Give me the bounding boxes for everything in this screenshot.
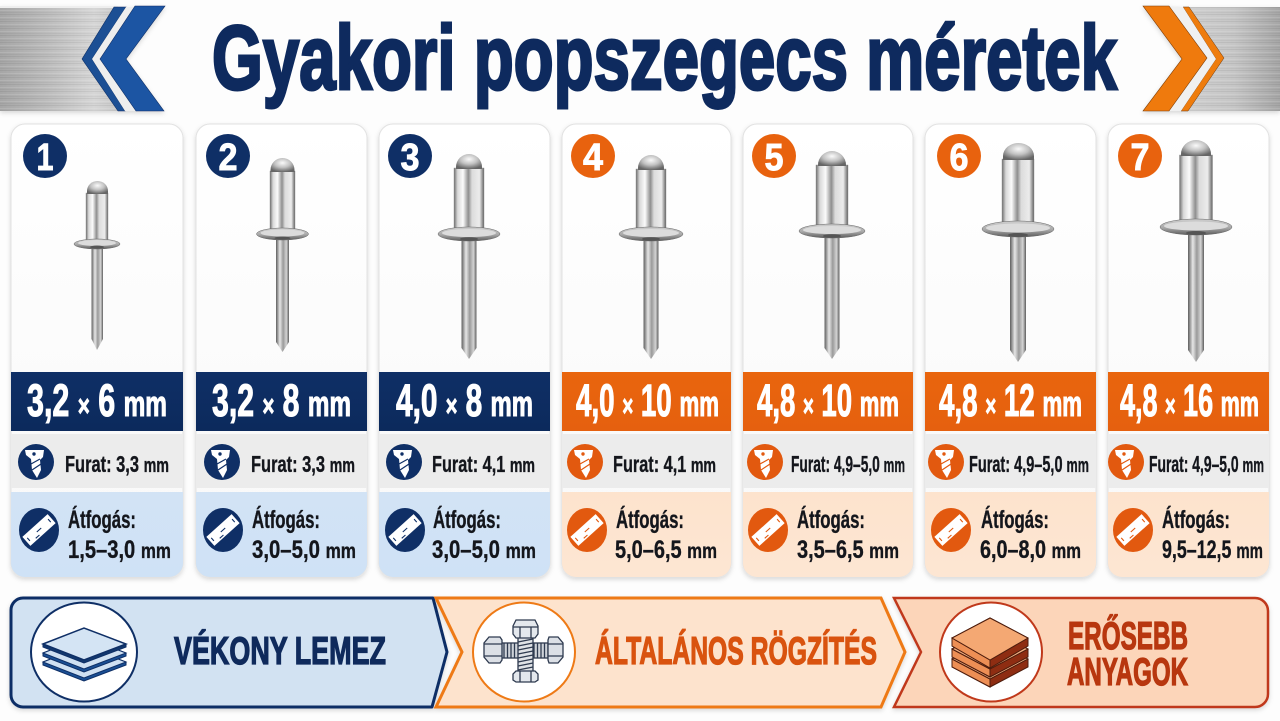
drill hole row [743, 434, 913, 488]
grip range row: Átfogás: [252, 505, 320, 534]
left header decoration: metal strip with blue chevrons [0, 6, 165, 111]
number badge 6 [937, 134, 981, 179]
number badge 2 [206, 134, 250, 179]
grip range row: Átfogás: [616, 505, 684, 534]
grip range row: 6,0–8,0 mm [980, 536, 1081, 564]
label: VÉKONY LEMEZ [174, 629, 386, 673]
drill hole row [11, 434, 183, 488]
grip range row: Átfogás: [981, 505, 1049, 534]
number badge 4: 4 [583, 137, 603, 179]
panel: card 6 [925, 124, 1096, 577]
drill hole row: Furat: 4,9–5,0 mm [791, 451, 905, 477]
number badge 1: 1 [36, 137, 54, 179]
grip range row: 1,5–3,0 mm [68, 536, 171, 564]
grip range row: 5,0–6,5 mm [615, 536, 717, 564]
number badge 1 [23, 134, 67, 179]
icon: rivet 1 [74, 181, 120, 350]
number badge 7 [1118, 134, 1162, 179]
drill hole row [1108, 434, 1269, 488]
grip range row [925, 492, 1096, 577]
size band: 4,0 × 10 mm [576, 375, 719, 426]
label: ERŐSEBB [1068, 614, 1188, 658]
size band: 4,0 × 8 mm [396, 375, 533, 426]
number badge 4 [571, 134, 615, 179]
panel: card 2 [196, 124, 367, 577]
size band: 4,8 × 12 mm [939, 375, 1082, 426]
icon: rivet 7 [1160, 140, 1232, 362]
grip range row: Átfogás: [1162, 505, 1230, 534]
icon: rivet 6 [982, 143, 1054, 362]
number badge 5: 5 [764, 137, 784, 179]
size band: 4,8 × 10 mm [757, 375, 899, 426]
drill hole row [562, 434, 731, 488]
panel: card 4 [562, 124, 731, 577]
grip range row [379, 492, 550, 577]
grip range row: 3,0–5,0 mm [432, 536, 536, 564]
grip range row [11, 492, 183, 577]
panel: card 1 [11, 124, 183, 577]
panel: card 7 [1108, 124, 1269, 577]
label: ÁLTALÁNOS RÖGZÍTÉS [595, 629, 877, 673]
panel: thin sheet arrow [11, 598, 447, 707]
drill hole row [925, 434, 1096, 488]
icon: thick plates [940, 602, 1042, 702]
drill hole row: Furat: 3,3 mm [65, 451, 169, 477]
grip range row: Átfogás: [68, 505, 136, 534]
grip range row: 9,5–12,5 mm [1162, 536, 1263, 564]
drill hole row: Furat: 3,3 mm [251, 451, 355, 477]
drill hole row: Furat: 4,1 mm [613, 451, 716, 477]
grip range row [562, 492, 731, 577]
grip range row: 3,0–5,0 mm [252, 536, 356, 564]
number badge 6: 6 [950, 137, 968, 179]
drill hole row: Furat: 4,1 mm [432, 451, 535, 477]
label: ANYAGOK [1067, 651, 1188, 694]
icon: rivet 4 [619, 155, 683, 359]
number badge 5 [752, 134, 796, 179]
size band: 3,2 × 8 mm [212, 375, 351, 426]
drill hole row: Furat: 4,9–5,0 mm [969, 451, 1089, 477]
number badge 2: 2 [218, 137, 238, 179]
drill hole row [379, 434, 550, 488]
number badge 3: 3 [400, 137, 420, 179]
icon: rivet 5 [799, 151, 865, 359]
icon: rivet 3 [438, 154, 500, 359]
panel: general fastening arrow [436, 598, 905, 707]
label [1067, 614, 1188, 694]
number badge 3 [388, 134, 432, 179]
grip range row [1108, 492, 1269, 577]
grip range row: Átfogás: [433, 505, 501, 534]
panel: card 5 [743, 124, 913, 577]
drill hole row [196, 434, 367, 488]
grip range row [196, 492, 367, 577]
size band: 3,2 × 6 mm [27, 375, 167, 426]
icon: thin sheets [31, 602, 137, 702]
grip range row [743, 492, 913, 577]
icon: nuts and bolts [473, 602, 575, 702]
icon: rivet 2 [256, 158, 308, 352]
number badge 7: 7 [1130, 137, 1150, 179]
panel: stronger materials arrow [894, 598, 1268, 707]
grip range row: 3,5–6,5 mm [797, 536, 899, 564]
right header decoration: metal strip with orange chevrons [1143, 6, 1280, 111]
size band: 4,8 × 16 mm [1120, 375, 1259, 426]
grip range row: Átfogás: [797, 505, 865, 534]
panel: card 3 [379, 124, 550, 577]
